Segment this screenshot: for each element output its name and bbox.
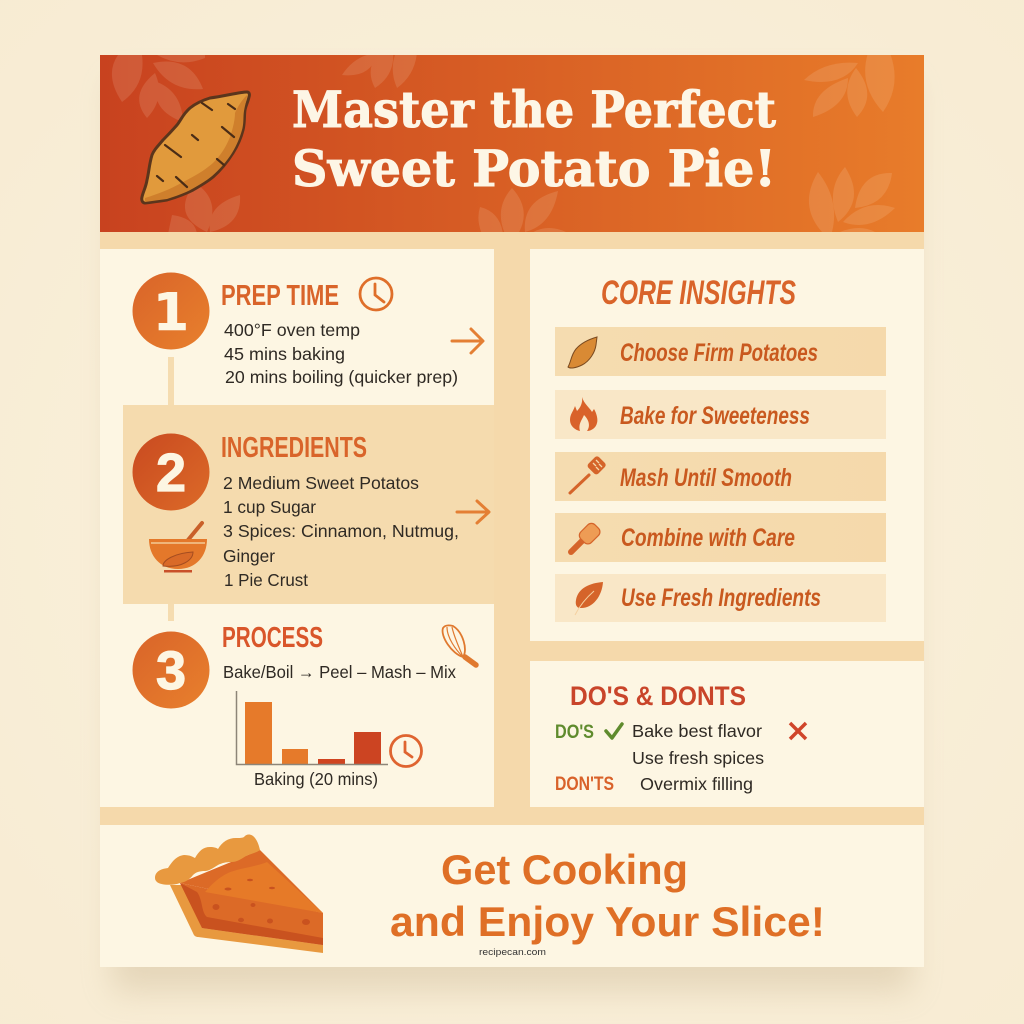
- insight: combine with care: Combine with Care: [621, 524, 795, 552]
- heading: ingredients: INGREDIENTS: [221, 432, 367, 464]
- step number 2: [132, 434, 210, 510]
- poster card: [100, 52, 924, 967]
- do's label: DO'S: [555, 722, 594, 743]
- insight: use fresh ingredients: Use Fresh Ingredients: [621, 584, 821, 612]
- icon: masher: [570, 455, 607, 493]
- insight: combine with care: [555, 513, 886, 562]
- insight: bake for sweeteness: [555, 390, 886, 439]
- panel: prep time: [100, 249, 494, 604]
- step number 3: 3: [156, 641, 186, 701]
- ingredient list: [223, 473, 459, 590]
- call to action: Get Cooking: [441, 846, 688, 893]
- arrow: [457, 501, 489, 523]
- icon: mixing bowl: [149, 523, 207, 572]
- title: Master the Perfect: [292, 80, 776, 139]
- panel: core insights: [530, 249, 924, 641]
- icon: whisk: [443, 625, 476, 665]
- heading: process: PROCESS: [222, 622, 323, 654]
- step number 1: 1: [153, 283, 189, 343]
- icon: sweet potato: [142, 92, 249, 203]
- title: [292, 80, 776, 198]
- ingredient list: 1 Pie Crust: [224, 570, 308, 590]
- don'ts label: DON'TS: [555, 774, 614, 795]
- ingredient list: Ginger: [223, 546, 275, 566]
- ingredient list: 1 cup Sugar: [223, 497, 316, 517]
- heading: prep time: PREP TIME: [221, 280, 339, 312]
- filling side: [180, 883, 323, 945]
- ingredient list: 3 Spices: Cinnamon, Nutmug,: [223, 521, 459, 541]
- heading: core insights: CORE INSIGHTS: [601, 274, 796, 312]
- icon: spatula: [571, 521, 602, 552]
- do's list: Bake best flavor: [632, 721, 762, 741]
- insight: use fresh ingredients: [555, 574, 886, 622]
- don'ts list: Overmix filling: [640, 774, 753, 794]
- call to action: and Enjoy Your Slice!: [390, 898, 825, 945]
- watermark: recipecan.com: [479, 947, 546, 958]
- chart caption: Baking (20 mins): [254, 769, 378, 789]
- prep details: 45 mins baking: [224, 344, 345, 364]
- insight: choose firm potatoes: [555, 327, 886, 376]
- icon: pie slice: [155, 834, 323, 953]
- panel: do's and don'ts: [530, 661, 924, 807]
- do's list: Use fresh spices: [632, 748, 764, 768]
- icon: flame: [570, 397, 597, 431]
- filling top: [180, 850, 323, 913]
- bar chart: [236, 691, 388, 789]
- header banner: [100, 52, 924, 234]
- panel: process: [100, 604, 494, 807]
- ingredient list: 2 Medium Sweet Potatos: [223, 473, 419, 493]
- icon: leaf: [575, 582, 603, 615]
- heading: do's and don'ts: DO'S & DONTS: [570, 681, 746, 711]
- step number 3: [132, 632, 210, 708]
- decorative leaves: [112, 52, 895, 234]
- crimped edge: [155, 834, 260, 885]
- panel: ingredients: [123, 405, 494, 604]
- icon: chart clock: [390, 736, 422, 766]
- do's list: [632, 721, 764, 768]
- insight: bake for sweeteness: Bake for Sweeteness: [620, 402, 810, 430]
- step number 2: 2: [156, 443, 186, 503]
- prep details: 400°F oven temp: [224, 320, 360, 340]
- prep details: 20 mins boiling (quicker prep): [225, 367, 458, 387]
- insight: mash until smooth: Mash Until Smooth: [620, 464, 792, 492]
- crust base: [170, 885, 323, 953]
- insight: mash until smooth: [555, 452, 886, 501]
- icon: potato: [568, 337, 597, 368]
- prep details: [224, 320, 458, 387]
- step number 1: [132, 272, 210, 350]
- process steps: Bake/Boil → Peel – Mash – Mix: [223, 662, 456, 682]
- call to action: [390, 846, 825, 945]
- arrow: [452, 329, 483, 353]
- icon: clock: [360, 278, 392, 310]
- icon: check: [606, 724, 622, 738]
- title: Sweet Potato Pie!: [292, 139, 776, 198]
- insight: choose firm potatoes: Choose Firm Potatoes: [620, 339, 818, 367]
- panel: footer call to action: [100, 825, 924, 967]
- icon: cross: [790, 723, 806, 739]
